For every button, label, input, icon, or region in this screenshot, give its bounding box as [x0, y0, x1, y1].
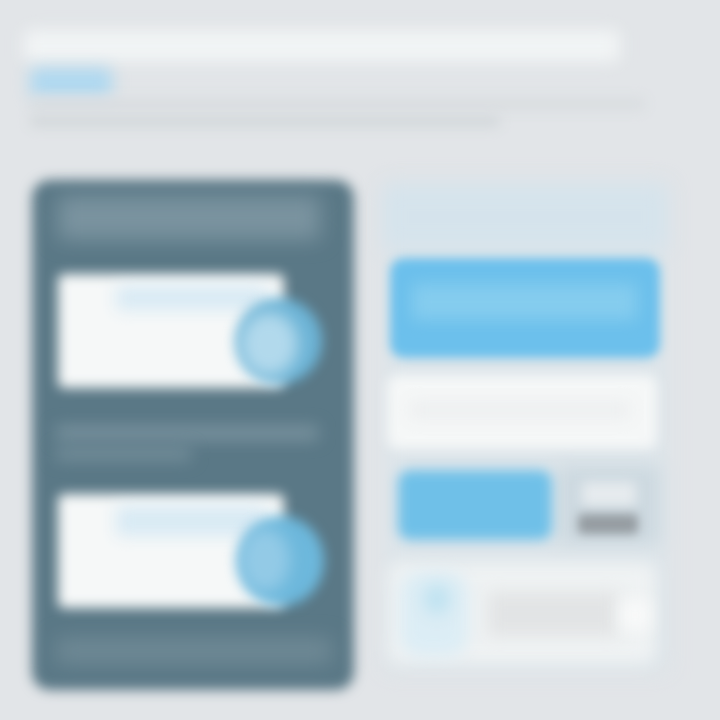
badge glyph — [424, 584, 450, 614]
icon: first circle — [236, 298, 322, 384]
section caption second line — [56, 448, 191, 460]
icon: device top — [582, 482, 636, 506]
card text — [410, 402, 630, 418]
section caption — [56, 426, 318, 440]
panel: left dark — [32, 180, 354, 690]
panel: blue callout — [390, 258, 660, 358]
icon: light blue badge — [400, 572, 468, 656]
panel heading — [58, 196, 320, 240]
panel: lower right background — [558, 466, 660, 544]
panel: right column background — [384, 182, 668, 672]
card: second white — [58, 494, 284, 608]
second circle glow — [240, 528, 290, 592]
panel: bottom white card — [388, 562, 656, 664]
panel: white text card — [387, 375, 657, 449]
card: first white — [58, 274, 284, 388]
subtitle second line — [30, 116, 500, 127]
icon: second circle — [238, 516, 324, 606]
title — [24, 30, 620, 62]
bottom card white accent — [620, 600, 650, 630]
subtitle — [30, 98, 645, 110]
card text — [488, 592, 618, 636]
footer text — [56, 638, 332, 664]
callout text — [412, 284, 637, 320]
first circle glyph — [240, 312, 298, 376]
icon: device base — [578, 514, 638, 534]
card one blue strip — [116, 286, 266, 310]
title highlight word — [30, 68, 112, 96]
panel: small blue card — [398, 470, 552, 540]
panel: right header — [384, 186, 666, 248]
card two blue strip — [116, 506, 266, 536]
